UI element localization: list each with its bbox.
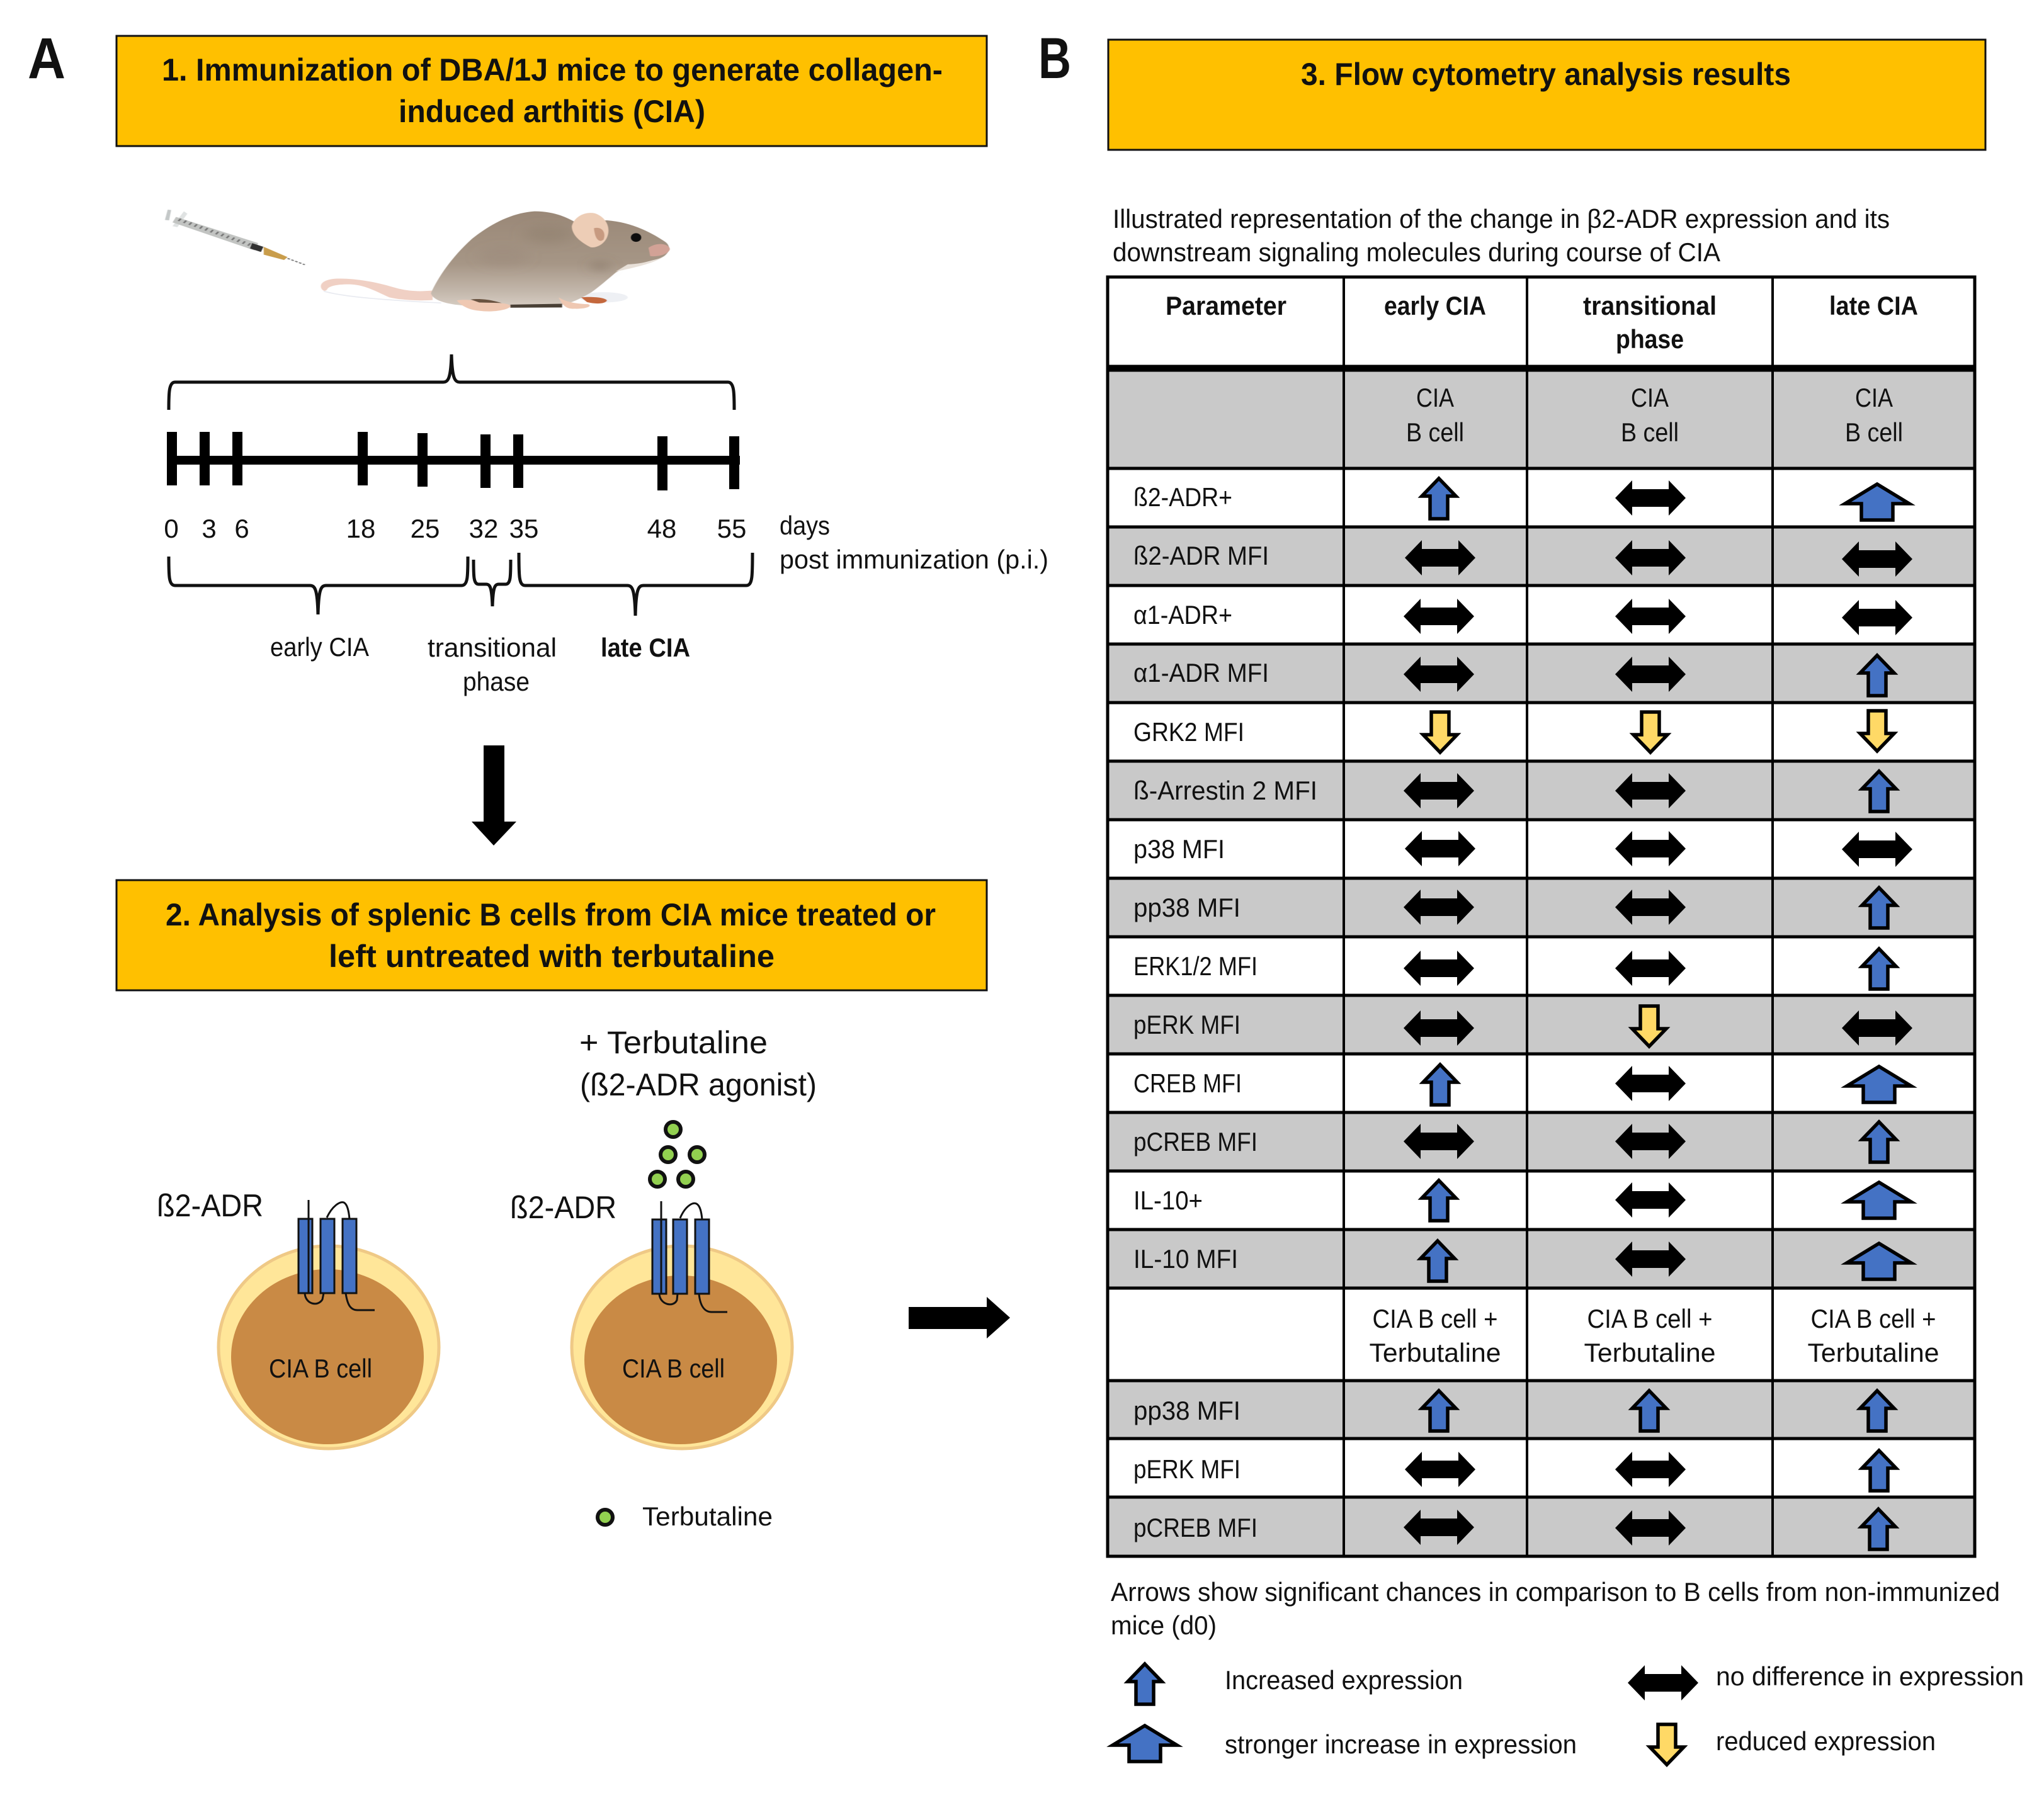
- timeline day labels: 32: [469, 514, 498, 543]
- row: ß-Arrestin 2 MFI: [1133, 771, 1896, 812]
- legend: increased expression: Increased expression: [1225, 1665, 1463, 1695]
- row: ß2-ADR+: ß2-ADR+: [1133, 482, 1232, 512]
- legend: stronger increase: [1113, 1726, 1577, 1762]
- row: GRK2 MFI: [1133, 711, 1894, 752]
- label: transitional phase: [428, 633, 557, 696]
- table footnote: mice (d0): [1111, 1610, 1217, 1640]
- bracket: late CIA: [519, 553, 752, 616]
- timeline day labels: 6: [234, 514, 249, 543]
- heading 3: flow cytometry: 3. Flow cytometry analysis results: [1301, 57, 1791, 92]
- table footnote: Arrows show significant chances in comparison to B cells from non-immunized: [1111, 1577, 2000, 1607]
- label: transitional phase: phase: [463, 667, 530, 696]
- row: GRK2 MFI: GRK2 MFI: [1133, 717, 1244, 747]
- timeline day labels: 55: [717, 514, 746, 543]
- subheader: CIA B cell + Terbutaline: Terbutaline: [1807, 1338, 1939, 1367]
- timeline day labels: 0: [164, 514, 179, 543]
- row: pERK MFI: [1133, 1006, 1912, 1046]
- row: α1-ADR MFI: α1-ADR MFI: [1133, 658, 1269, 687]
- heading 1: immunization: induced arthitis (CIA): [399, 94, 705, 129]
- row: pp38 MFI with terbutaline: [1133, 1391, 1894, 1431]
- row: α1-ADR+: [1133, 599, 1912, 635]
- row: pp38 MFI: pp38 MFI: [1133, 893, 1241, 922]
- bracket: early CIA: [169, 557, 468, 614]
- legend: reduced expression: [1650, 1724, 1936, 1765]
- heading 2: analysis: [116, 880, 987, 990]
- table header: phase: [1616, 324, 1684, 354]
- subheader: CIA B cell: [1406, 383, 1903, 447]
- cell: terbutaline treated B cell: CIA B cell: [622, 1354, 725, 1383]
- row: ß-Arrestin 2 MFI: ß-Arrestin 2 MFI: [1133, 776, 1317, 805]
- panel label B: B: [1038, 26, 1071, 91]
- row: pERK MFI with terbutaline: [1133, 1451, 1896, 1491]
- heading 1: immunization: [116, 36, 987, 146]
- illustration: mouse: [321, 212, 670, 312]
- receptor: left cell: [298, 1200, 375, 1310]
- bracket: immunization span: [169, 354, 734, 410]
- subheader: CIA B cell: B cell: [1406, 417, 1464, 447]
- row: pCREB MFI: [1133, 1122, 1896, 1162]
- legend: reduced expression: reduced expression: [1716, 1726, 1936, 1756]
- row: ERK1/2 MFI: ERK1/2 MFI: [1133, 951, 1258, 981]
- legend: increased expression: [1128, 1664, 1463, 1704]
- row: α1-ADR MFI: [1133, 655, 1894, 696]
- legend: terbutaline: Terbutaline: [642, 1502, 773, 1531]
- table caption: [1113, 204, 1890, 267]
- row: IL-10+: IL-10+: [1133, 1185, 1203, 1215]
- legend: no difference: [1628, 1661, 2024, 1700]
- heading 1: immunization: 1. Immunization of DBA/1J mice to generate collagen-: [162, 52, 943, 88]
- label: plus terbutaline: (ß2-ADR agonist): [580, 1067, 817, 1102]
- row: pp38 MFI: [1133, 888, 1896, 928]
- subheader: CIA B cell: B cell: [1845, 417, 1903, 447]
- row: ß2-ADR MFI: ß2-ADR MFI: [1133, 541, 1269, 570]
- heading 2: analysis: 2. Analysis of splenic B cells from CIA mice treated or: [166, 897, 936, 932]
- timeline day labels: 18: [346, 514, 375, 543]
- table header: Parameter: [1166, 291, 1286, 320]
- row: ß2-ADR+: [1133, 478, 1909, 520]
- table: expression changes: [1106, 276, 1976, 1556]
- row: pp38 MFI with terbutaline: pp38 MFI: [1133, 1396, 1241, 1425]
- subheader: CIA B cell: CIA: [1416, 383, 1454, 412]
- row: pERK MFI: pERK MFI: [1133, 1010, 1241, 1039]
- row: CREB MFI: [1133, 1065, 1911, 1105]
- subheader: CIA B cell + Terbutaline: Terbutaline: [1369, 1338, 1501, 1367]
- subheader: CIA B cell: B cell: [1621, 417, 1679, 447]
- timeline day labels: [164, 514, 746, 543]
- label: receptor left: ß2-ADR: [157, 1188, 263, 1223]
- subheader: CIA B cell + Terbutaline: CIA B cell +: [1587, 1304, 1713, 1333]
- subheader: CIA B cell + Terbutaline: Terbutaline: [1584, 1338, 1715, 1367]
- icon: syringe: [165, 210, 305, 265]
- axis caption: days: [780, 511, 830, 540]
- row: pERK MFI with terbutaline: pERK MFI: [1133, 1454, 1241, 1484]
- row: CREB MFI: CREB MFI: [1133, 1068, 1242, 1098]
- cell: untreated B cell: CIA B cell: [269, 1354, 372, 1383]
- row: ß2-ADR MFI: [1133, 540, 1912, 577]
- label: plus terbutaline: [579, 1025, 817, 1102]
- row: pCREB MFI with terbutaline: [1133, 1509, 1895, 1549]
- row: pCREB MFI: pCREB MFI: [1133, 1127, 1258, 1157]
- table header: early CIA: [1384, 291, 1486, 320]
- label: late CIA: late CIA: [601, 633, 690, 662]
- axis caption: [780, 511, 1048, 574]
- timeline: [167, 432, 740, 490]
- timeline day labels: 48: [647, 514, 676, 543]
- row: IL-10 MFI: [1133, 1241, 1911, 1281]
- legend: stronger increase: stronger increase in expression: [1225, 1729, 1577, 1759]
- subheader: CIA B cell + Terbutaline: CIA B cell +: [1811, 1304, 1936, 1333]
- timeline day labels: 35: [509, 514, 538, 543]
- subheader: CIA B cell + Terbutaline: CIA B cell +: [1373, 1304, 1497, 1333]
- table caption: downstream signaling molecules during course of CIA: [1113, 237, 1720, 267]
- cell: terbutaline treated B cell: [572, 1201, 792, 1449]
- label: early CIA: early CIA: [270, 632, 369, 662]
- receptor: right cell: [652, 1201, 727, 1312]
- label: receptor right: ß2-ADR: [510, 1190, 616, 1225]
- row: IL-10 MFI: IL-10 MFI: [1133, 1244, 1238, 1274]
- cell: untreated B cell: [219, 1200, 439, 1449]
- timeline day labels: 3: [202, 514, 217, 543]
- panel label A: A: [28, 26, 65, 91]
- arrow: right: [909, 1297, 1010, 1338]
- bracket: transitional phase: [474, 560, 511, 606]
- row: ERK1/2 MFI: [1133, 949, 1896, 989]
- axis caption: post immunization (p.i.): [780, 545, 1048, 574]
- row: p38 MFI: [1133, 831, 1912, 867]
- heading 2: analysis: left untreated with terbutaline: [329, 939, 775, 974]
- label: plus terbutaline: + Terbutaline: [579, 1025, 768, 1060]
- legend: no difference: no difference in expression: [1716, 1661, 2024, 1691]
- table footnote: [1111, 1577, 2000, 1640]
- subheader: CIA B cell: CIA: [1855, 383, 1893, 412]
- row: α1-ADR+: α1-ADR+: [1133, 600, 1232, 630]
- table grid: [1106, 276, 1976, 1556]
- label: transitional phase: transitional: [428, 633, 557, 662]
- table row shading: [1108, 368, 1975, 1556]
- table caption: Illustrated representation of the change in β2-ADR expression and its: [1113, 204, 1890, 234]
- table header: transitional: [1583, 291, 1717, 320]
- timeline day labels: 25: [411, 514, 440, 543]
- heading 3: flow cytometry: [1108, 40, 1985, 150]
- row: p38 MFI: p38 MFI: [1133, 834, 1225, 864]
- arrow: down: [472, 745, 516, 846]
- row: pCREB MFI with terbutaline: pCREB MFI: [1133, 1513, 1258, 1542]
- terbutaline molecules: [650, 1122, 705, 1187]
- subheader: CIA B cell + Terbutaline: [1369, 1304, 1939, 1367]
- table header: [1166, 291, 1918, 354]
- table header: late CIA: [1829, 291, 1918, 320]
- row: IL-10+: [1133, 1180, 1911, 1221]
- subheader: CIA B cell: CIA: [1631, 383, 1669, 412]
